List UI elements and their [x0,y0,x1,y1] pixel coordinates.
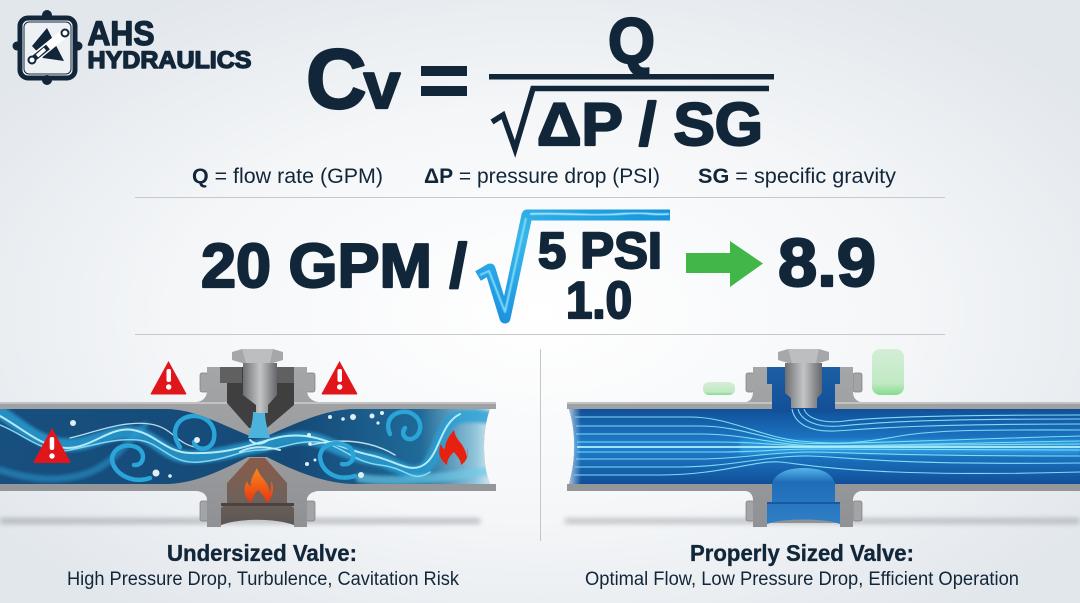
streamlines [574,409,1080,475]
bubbles [70,411,384,478]
icon: warning in pipe [34,428,70,463]
20 GPM text: 20 GPM / [201,232,467,301]
lower cavity [221,458,294,525]
bolts [746,373,862,521]
valve body steel [0,367,496,527]
variable legend [192,165,897,188]
legend Q: Q = flow rate (GPM) [192,165,383,188]
equals sign [421,66,467,96]
water square root [478,213,670,318]
legend SG: SG = specific gravity [698,165,897,188]
numerator Q: Q [608,5,655,77]
upper blue cavity [767,367,840,412]
logo: AHS Hydraulics [12,10,252,85]
5 PSI: 5 PSI [538,222,662,279]
caption: properly sized valve: Optimal Flow, Low Pressure Drop, Efficient Operation [585,569,1019,590]
legend delta P: ΔP = pressure drop (PSI) [424,165,660,188]
upper bonnet cavity [227,367,294,428]
caption: properly sized valve: Properly Sized Valve: [690,540,914,566]
swirls [175,416,214,449]
valve body steel [567,367,1080,527]
lower blue cavity [767,468,840,524]
green blank badge small [703,382,735,395]
caption: properly sized valve [585,540,1019,590]
blue flow channel [565,409,1080,484]
arrow [686,241,763,287]
panel: undersized valve [0,349,496,590]
stem and nut [778,349,829,408]
formula left side: Cv [306,32,401,126]
stem and nut [232,349,283,413]
fluid channel turbulence [0,405,495,487]
icon: warning top left [151,361,186,394]
green blank badge tall [872,349,904,395]
icon: warning top right [322,361,357,394]
caption: undersized valve: Undersized Valve: [167,540,357,566]
Cv formula [306,5,774,158]
narrow port jet [248,412,270,438]
shadow [565,519,1080,523]
denominator: ΔP / SG [537,91,763,158]
icon: lower flame [244,468,273,503]
1.0: 1.0 [566,272,632,330]
panel: properly sized valve [565,349,1080,590]
icon: hydraulic cylinder badge [12,10,82,85]
shadow [0,519,480,523]
caption: undersized valve: High Pressure Drop, Turbulence, Cavitation Risk [67,569,459,590]
result 8.9: 8.9 [778,225,876,301]
icon: flame in pipe [439,430,468,465]
logo wordmark: AHS [88,15,154,53]
logo wordmark [88,15,252,74]
caption: undersized valve [67,540,459,590]
fraction bar [489,74,774,80]
worked example [201,213,876,330]
radical sign [492,88,769,149]
bolts [200,373,315,521]
logo wordmark: HYDRAULICS [88,47,252,74]
